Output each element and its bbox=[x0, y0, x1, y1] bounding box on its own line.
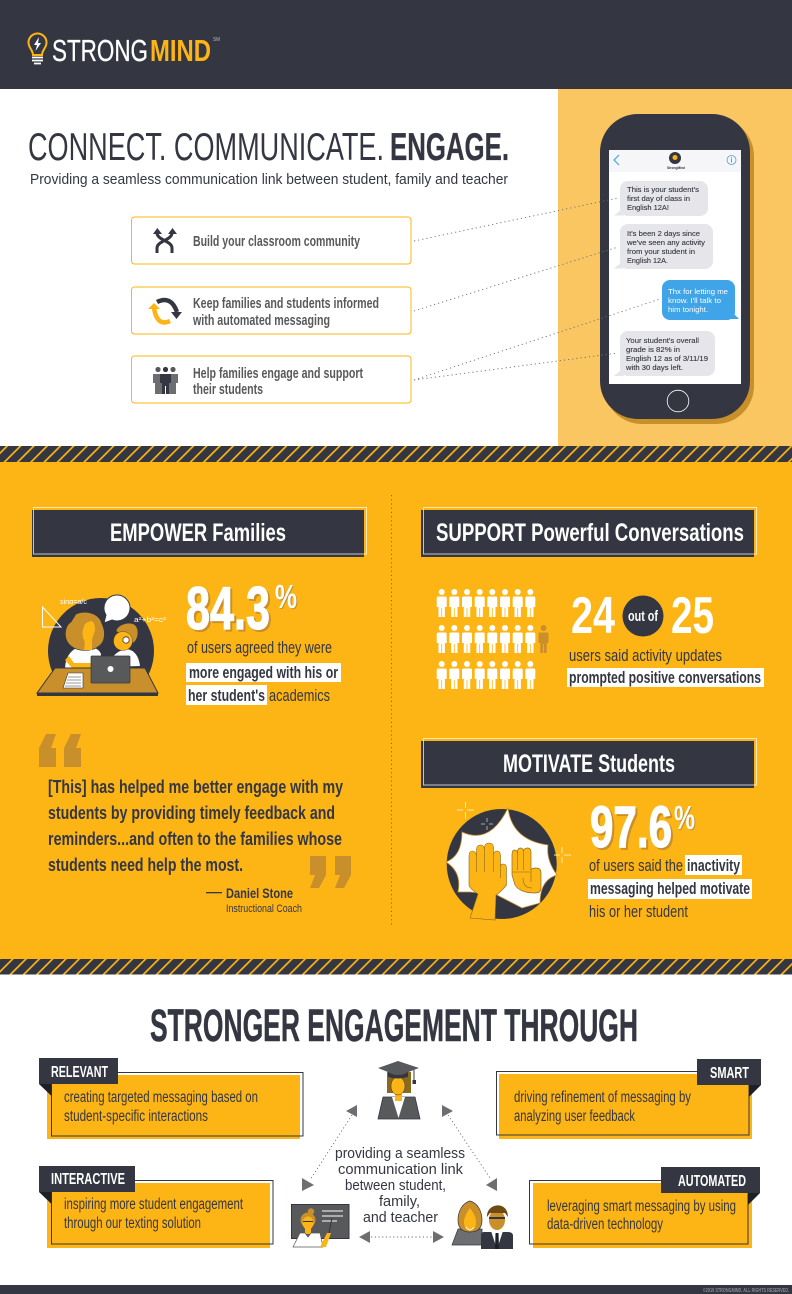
text bubble 1: English 12A! bbox=[627, 203, 669, 212]
stat description: academics bbox=[269, 686, 330, 705]
text bubble 3 reply: him tonight. bbox=[668, 305, 708, 314]
central text: providing a seamless bbox=[335, 1146, 465, 1162]
stat description: his or her student bbox=[589, 902, 688, 921]
stat: 84.3%: % bbox=[275, 578, 297, 615]
card: relevant: creating targeted messaging based on bbox=[64, 1089, 258, 1106]
stripe band bottom bbox=[0, 959, 792, 974]
icon: three people bbox=[153, 367, 178, 394]
card: relevant bbox=[39, 1058, 303, 1139]
quote: reminders...and often to the families whose bbox=[48, 828, 342, 849]
text bubble 2 bbox=[614, 224, 713, 269]
text bubble 2: from your student in bbox=[627, 247, 695, 256]
feature: family support: their students bbox=[193, 381, 263, 398]
main title: CONNECT. COMMUNICATE. bbox=[28, 126, 384, 169]
stat: 24 out of 25: out of bbox=[628, 609, 658, 625]
stat description: inactivity bbox=[687, 856, 740, 875]
phone background panel bbox=[558, 89, 792, 446]
subtitle: Providing a seamless communication link between student, family and teacher bbox=[30, 172, 508, 188]
quote: students need help the most. bbox=[48, 854, 243, 875]
stat description bbox=[186, 638, 341, 705]
quote: Daniel Stone bbox=[226, 886, 293, 901]
stat: 97.6%: 97.6 bbox=[592, 797, 674, 862]
quote: students by providing timely feedback and bbox=[48, 802, 335, 823]
text bubble 3 reply bbox=[662, 280, 739, 320]
dotted connectors bbox=[414, 198, 660, 380]
right hand bbox=[512, 848, 541, 893]
icon: high five bbox=[446, 802, 571, 920]
card: smart: analyzing user feedback bbox=[514, 1108, 635, 1125]
quote: [This] has helped me better engage with my bbox=[48, 776, 344, 797]
stat: 84.3%: 84.3 bbox=[188, 577, 272, 644]
main title: ENGAGE. bbox=[390, 126, 509, 169]
icon: parent and student at laptop: sinα=a/c bbox=[60, 597, 87, 606]
sparkles bbox=[457, 802, 571, 863]
card: interactive bbox=[39, 1166, 273, 1248]
card: interactive: inspiring more student engagement bbox=[64, 1196, 244, 1213]
heading: support powerful conversations bbox=[421, 508, 756, 557]
StrongMind logo: STRONG bbox=[52, 33, 148, 68]
card: relevant: RELEVANT bbox=[51, 1064, 108, 1081]
text bubble 2: we've seen any activity bbox=[626, 238, 705, 247]
central text: between student, bbox=[345, 1178, 446, 1194]
icon: teacher at board bbox=[292, 1204, 349, 1247]
stat description: of users said the bbox=[589, 856, 683, 875]
card: interactive: through our texting solution bbox=[64, 1215, 201, 1232]
icon: opening quote marks bbox=[39, 734, 81, 767]
icon: parent and student at laptop bbox=[37, 595, 167, 704]
stat: 84.3%: % bbox=[276, 579, 298, 616]
icon: parent and student at laptop: a²+b²=c² bbox=[134, 615, 167, 624]
panel: connect communicate engage bbox=[28, 89, 792, 446]
heading: empower families: EMPOWER Families bbox=[110, 519, 286, 547]
heading: empower families bbox=[32, 508, 366, 557]
feature: automated messaging bbox=[132, 287, 411, 334]
speech bubble bbox=[104, 595, 130, 623]
icon: student graduate bbox=[378, 1061, 420, 1119]
stat: 24 out of 25 bbox=[571, 587, 714, 645]
text bubble 3 reply: Thx for letting me bbox=[668, 287, 728, 296]
quote bbox=[39, 734, 351, 915]
StrongMind logo: MIND bbox=[150, 33, 211, 68]
arrows bbox=[302, 1105, 497, 1243]
text bubble 1: This is your student's bbox=[627, 185, 699, 194]
icon: refresh arrows bbox=[148, 300, 182, 322]
stat: 97.6%: % bbox=[674, 799, 695, 836]
feature: automated messaging: with automated messaging bbox=[192, 312, 330, 329]
text bubble 3 reply: know. I'll talk to bbox=[668, 296, 721, 305]
stat description: users said activity updates bbox=[569, 646, 722, 665]
phone bbox=[600, 114, 754, 424]
stat description bbox=[588, 855, 752, 921]
feature: family support bbox=[132, 356, 411, 403]
quote: Instructional Coach bbox=[226, 903, 302, 915]
phone: StrongMind bbox=[667, 166, 686, 170]
burst bbox=[446, 808, 557, 908]
card: relevant: student-specific interactions bbox=[64, 1108, 208, 1125]
text bubble 4: English 12 as of 3/11/19 bbox=[626, 354, 708, 363]
StrongMind logo bbox=[28, 33, 220, 68]
stat description: her student's bbox=[188, 686, 265, 705]
StrongMind logo: SM bbox=[213, 37, 220, 43]
card: smart: driving refinement of messaging by bbox=[514, 1089, 691, 1106]
card: smart: SMART bbox=[710, 1065, 749, 1082]
diagram: student family teacher triangle bbox=[292, 1061, 513, 1249]
stat: 84.3%: 84.3 bbox=[186, 575, 270, 642]
card: automated: AUTOMATED bbox=[678, 1173, 746, 1190]
text bubble 4: grade is 82% in bbox=[626, 345, 680, 354]
stat: 97.6%: 97.6 bbox=[590, 795, 672, 860]
stat description: more engaged with his or bbox=[189, 663, 338, 682]
stripe band top bbox=[0, 446, 792, 462]
stat: 24 out of 25: 24 bbox=[571, 587, 615, 645]
stat: 97.6%: % bbox=[675, 800, 696, 837]
icon: parents bbox=[452, 1201, 513, 1249]
footer bbox=[0, 1285, 792, 1294]
text bubble 1 bbox=[614, 181, 708, 216]
central text bbox=[335, 1146, 465, 1226]
card: automated: data-driven technology bbox=[547, 1216, 663, 1233]
card: smart bbox=[496, 1059, 761, 1139]
text bubble 4 bbox=[614, 331, 715, 376]
card: interactive: INTERACTIVE bbox=[51, 1171, 125, 1188]
heading: motivate students bbox=[421, 738, 756, 788]
text bubble 1: first day of class in bbox=[627, 194, 690, 203]
central text: communication link bbox=[338, 1162, 464, 1178]
feature: automated messaging: Keep families and students informed bbox=[193, 295, 379, 312]
stat: 24 out of 25: 25 bbox=[671, 587, 714, 645]
feature: family support: Help families engage and support bbox=[193, 365, 363, 382]
header band bbox=[0, 0, 792, 89]
text bubble 4: Your student's overall bbox=[626, 336, 699, 345]
feature: classroom community: Build your classroom community bbox=[193, 233, 360, 250]
feature: classroom community bbox=[132, 217, 411, 264]
panel: results bbox=[0, 462, 792, 959]
card: automated bbox=[530, 1167, 760, 1248]
text bubble 4: with 30 days left. bbox=[625, 363, 683, 372]
central text: and teacher bbox=[363, 1210, 438, 1226]
central text: family, bbox=[379, 1194, 420, 1210]
heading: motivate students: MOTIVATE Students bbox=[503, 750, 675, 778]
icon array: 24 of 25 people bbox=[437, 589, 548, 689]
stat description: of users agreed they were bbox=[187, 638, 332, 657]
left hand bbox=[469, 843, 506, 920]
text bubble 2: English 12A. bbox=[627, 256, 668, 265]
icon: crossing arrows bbox=[153, 228, 177, 253]
text bubble 2: It's been 2 days since bbox=[627, 229, 700, 238]
stat description bbox=[567, 646, 764, 687]
